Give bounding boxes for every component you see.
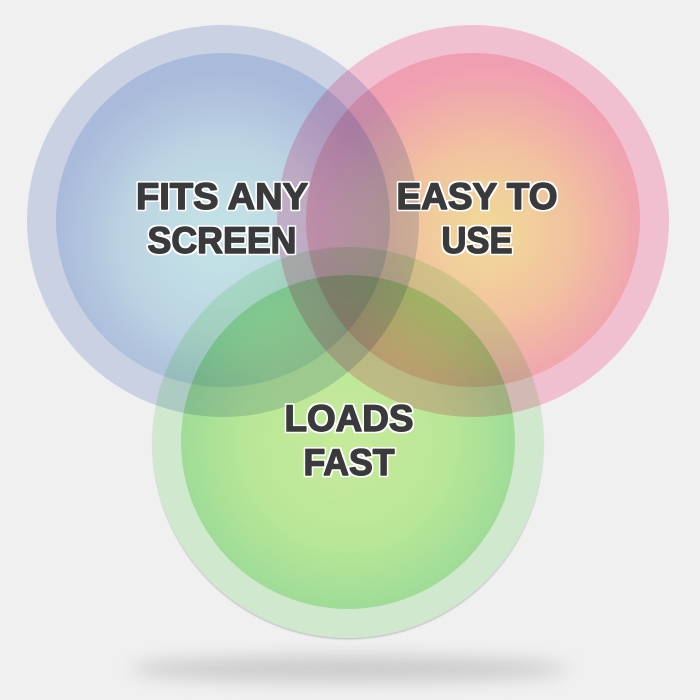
- label: fits any screen: SCREEN: [148, 220, 296, 261]
- label: loads fast: LOADS: [284, 398, 414, 439]
- label: easy to use: EASY TO: [396, 176, 558, 217]
- ground shadow: [129, 656, 569, 682]
- label: loads fast: FAST: [304, 442, 395, 483]
- label: easy to use: [396, 176, 558, 261]
- label: easy to use: USE: [442, 220, 512, 261]
- label: loads fast: [284, 398, 414, 483]
- circle: fits any screen: [27, 25, 419, 417]
- label: fits any screen: [136, 176, 308, 261]
- label: fits any screen: FITS ANY: [136, 176, 308, 217]
- circle: loads fast: [152, 247, 544, 640]
- circle: easy to use: [277, 25, 669, 417]
